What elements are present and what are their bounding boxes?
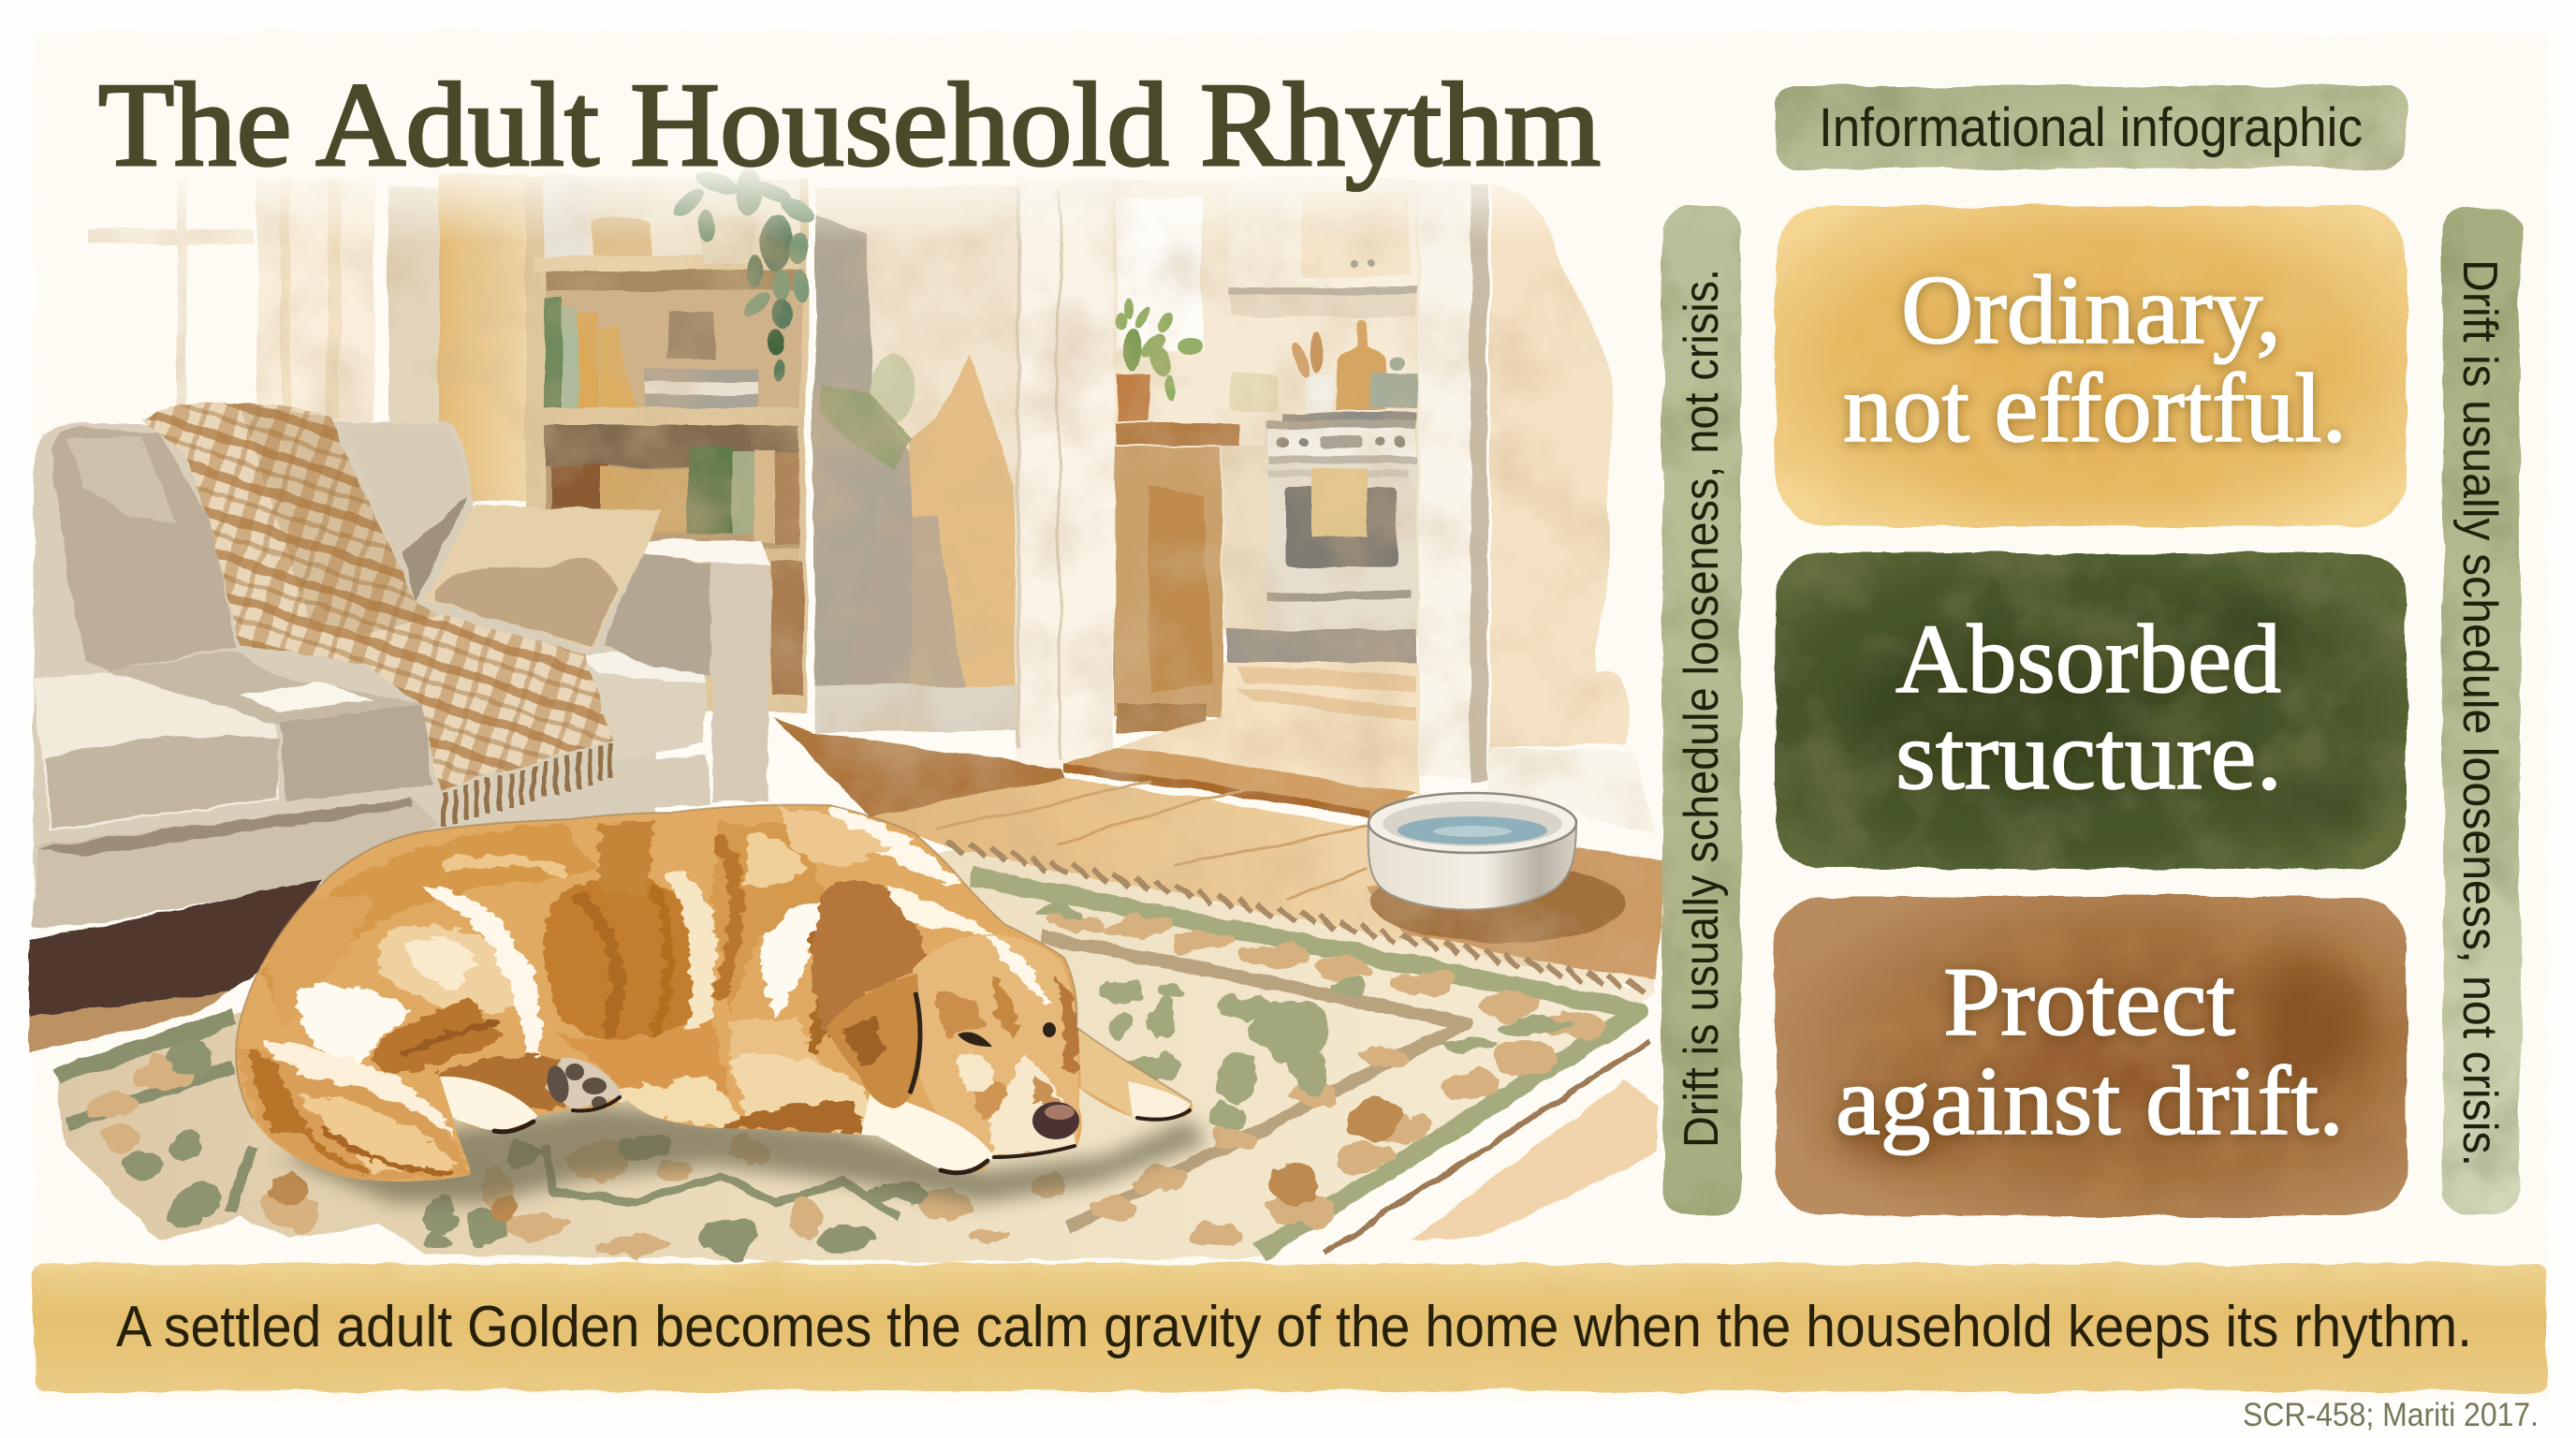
bowl inside [1383,801,1562,846]
sofa [29,403,771,1053]
floor under sofa [29,992,229,1053]
dog outline [236,804,1192,1119]
plank lines [936,782,1371,899]
card heading: Protect [1943,946,2235,1056]
fur strokes [281,843,822,1172]
right seat top [582,651,706,683]
card: ordinary, not effortful [1776,206,2407,526]
illustration: living room with sleeping golden retriever [29,159,1662,1262]
bottom banner [34,1264,2546,1391]
room background [89,167,1662,992]
card wash [1776,206,2407,526]
card heading: structure. [1895,700,2282,810]
seat highlight [242,682,374,712]
card heading: against drift. [1836,1046,2344,1155]
hanging plant [668,167,816,381]
raised paw [545,1058,622,1110]
rug floral band and medallions [88,905,1603,1256]
stove [1266,412,1417,631]
arm front [710,550,771,801]
base right [562,755,711,814]
tag: informational infographic [1777,86,2406,169]
throw pillow [425,506,661,649]
brown floor around bowl [1367,848,1662,981]
bowl body [1368,820,1576,910]
dog mouth and paw shadows [494,1097,1190,1173]
card heading [1843,255,2347,462]
kitchen window [1118,197,1202,351]
door frame [1017,178,1114,768]
side strip left [1662,206,1741,1215]
sofa back outer [34,423,655,927]
source note: SCR-458; Mariti 2017. [2243,1397,2539,1433]
dark wood floor [773,716,1076,816]
jamb lines [1471,183,1487,782]
door jamb right [1419,178,1471,777]
dog eyes [958,1022,1056,1047]
dog ear [827,974,921,1108]
door threshold [1061,746,1415,816]
card dark pools [1835,955,2368,1161]
card heading: Ordinary, [1901,255,2281,364]
left back cushion [53,427,236,670]
rug shadow under dog [281,1105,1208,1203]
card wash [1776,896,2407,1216]
seat top left [109,650,421,726]
rug [56,841,1657,1262]
dog nose [1032,1102,1079,1139]
threshold edge [1061,762,1369,816]
tag text: Informational infographic [1819,97,2363,158]
rug fringe [949,841,1644,992]
kitchen floor [1118,663,1419,796]
right back cushion shadow [402,496,468,601]
frame shade lines [1017,187,1061,758]
throw fold shade [240,404,440,637]
floor at rug corner [1409,1081,1657,1240]
rug outer edge and floor [1325,1041,1657,1253]
bowl rim [1368,793,1576,853]
side strip right [2443,208,2520,1215]
right back cushion [349,427,470,599]
front cushion left shade [45,736,278,829]
lower cabinet [1223,445,1266,630]
light wood floor [871,777,1655,992]
plaid throw blanket [139,403,613,789]
kitchen back wall [1114,178,1419,637]
water [1398,816,1547,844]
rug border stripes [56,876,1640,1253]
arm inner [604,552,711,676]
right wall [1490,183,1629,746]
left strip wash [1662,206,1741,1215]
throw fringe [444,742,610,827]
sofa base [34,800,440,927]
card dark pools [1853,599,2368,843]
bowl floor shadow [1371,864,1624,943]
counter island [1115,423,1240,732]
front cushion right [279,704,432,801]
hallway wall [814,187,1017,732]
cushion highlight [66,435,178,524]
banner wash [34,1264,2546,1391]
front cushion left [34,672,281,831]
head markings [936,934,1079,1157]
left strip text: Drift is usually schedule looseness, not crisis. [1675,269,1729,1148]
bookshelf [526,176,807,712]
arm top [640,539,771,565]
card heading [1895,604,2282,810]
right front paw [1078,1027,1192,1118]
upper cabinet [1229,183,1416,316]
kitchen baseboard [1225,629,1417,663]
right strip text: Drift is usually schedule looseness, not crisis. [2452,259,2507,1167]
chest and shoulder [777,805,997,1039]
right strip wash [2443,208,2520,1215]
fade of scene top into paper [32,159,1623,243]
curtain [438,173,528,501]
base shade line [39,800,412,857]
tag wash [1777,86,2406,169]
card: absorbed structure [1776,552,2407,869]
pillow shade [435,558,620,646]
kitchen utensils and cutting board [1229,318,1417,410]
paw pads [544,1064,607,1109]
dog body [225,796,1208,1189]
rear paw [440,1077,539,1133]
front paw [861,1091,994,1173]
right seat [585,653,706,760]
card wash [1776,552,2407,869]
kitchen plant [1116,297,1201,421]
rug base [56,850,1655,1262]
coat washes [239,819,880,1181]
card heading: not effortful. [1843,353,2347,462]
shadow under sofa [29,880,323,1016]
card heading [1836,946,2344,1155]
baseboard right [1488,746,1657,833]
head [913,934,1079,1157]
water bowl [1368,793,1576,910]
paw toes [1128,1081,1191,1118]
title: The Adult Household Rhythm [98,58,1601,191]
card: protect against drift [1776,896,2407,1216]
kitchen floor streaks [1236,667,1415,719]
card heading: Absorbed [1895,604,2281,713]
golden retriever [225,796,1208,1203]
window wall [89,178,439,431]
